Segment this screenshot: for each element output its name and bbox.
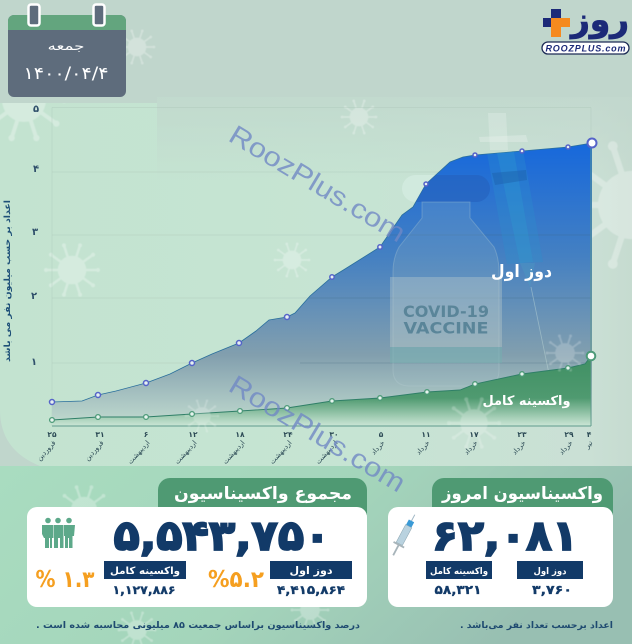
x axis month labels: اردیبهشت — [221, 439, 247, 466]
first dose line — [52, 143, 592, 402]
x axis day labels: ۵ — [379, 430, 384, 439]
total heading tab — [158, 478, 367, 515]
watermark top: RoozPlus.com — [224, 119, 411, 248]
full vaccine percent: % ۱.۳ — [36, 567, 94, 593]
today first dose value: ۳,۷۶۰ — [532, 582, 572, 597]
x axis month labels: خرداد — [511, 439, 527, 457]
header strip over big virus — [0, 0, 157, 103]
y axis labels: ۳ — [32, 227, 38, 238]
vial illustration: VACCINE — [404, 318, 488, 338]
x axis day labels: ۱۱ — [421, 430, 431, 439]
first dose value: ۴,۴۱۵,۸۶۴ — [277, 583, 345, 597]
vaccine label: COVID-19 — [403, 302, 489, 321]
x axis day labels: ۲۴ — [283, 430, 293, 439]
y axis labels — [31, 104, 39, 368]
x axis day labels — [47, 430, 592, 439]
x axis day labels: ۲۵ — [47, 430, 57, 439]
x axis day labels: ۱۷ — [469, 430, 479, 439]
x axis day labels: ۴ — [587, 430, 592, 439]
chart — [50, 108, 596, 449]
total card — [27, 507, 367, 607]
chart panel background — [0, 97, 632, 466]
panel: total vaccination: واکسینه کامل — [110, 566, 180, 577]
x axis month labels: اردیبهشت — [173, 439, 199, 466]
y axis labels: ۱ — [31, 357, 37, 368]
logo — [542, 0, 629, 54]
today full vaccine value: ۵۸,۳۲۱ — [434, 582, 482, 597]
panel: total vaccination: دوز اول — [290, 565, 333, 577]
x axis day labels: ۱۸ — [235, 430, 245, 439]
x axis month labels: اردیبهشت — [314, 439, 340, 466]
x axis month labels: اردیبهشت — [268, 439, 294, 466]
x axis day labels: ۶ — [144, 430, 148, 439]
x axis month labels: خرداد — [463, 439, 479, 457]
syringe illustration — [488, 152, 548, 370]
calendar weekday: جمعه — [48, 39, 84, 53]
panel: today vaccination — [388, 478, 613, 607]
bottom band background — [0, 466, 632, 644]
calendar date: ۱۴۰۰/۰۴/۴ — [24, 64, 108, 84]
logo site name: ROOZPLUS.com — [546, 44, 626, 54]
x axis month labels: اردیبهشت — [126, 439, 152, 466]
bottom and header virus decorations — [58, 29, 329, 644]
total number: ۵,۵۴۳,۷۵۰ — [114, 511, 330, 560]
footnote: today: اعداد برحسب تعداد نفر می‌باشد . — [460, 621, 613, 631]
x axis month labels: خرداد — [370, 439, 386, 457]
series label: full vaccine: واکسینه کامل — [482, 394, 570, 409]
today heading: واکسیناسیون امروز — [441, 484, 603, 504]
full vaccine markers — [50, 352, 595, 422]
first dose label — [270, 561, 352, 579]
icon: people — [42, 518, 75, 548]
y axis labels: ۴ — [33, 164, 39, 175]
series label: first dose: دوز اول — [491, 262, 552, 282]
x axis day labels: ۳۱ — [95, 430, 105, 439]
y axis labels: ۲ — [31, 291, 37, 302]
x axis month labels — [35, 439, 595, 466]
panel: today vaccination: واکسینه کامل — [430, 567, 488, 577]
x axis day labels: ۱۲ — [188, 430, 198, 439]
panel: today vaccination: دوز اول — [534, 567, 567, 577]
chart virus overlays — [185, 334, 584, 449]
x axis month labels: تیر — [583, 439, 595, 451]
background virus decorations — [0, 59, 632, 297]
x axis day labels: ۳۰ — [329, 430, 339, 439]
area: first dose — [52, 143, 592, 426]
today full vaccine label — [426, 561, 492, 579]
today heading tab — [432, 478, 613, 515]
panel: total vaccination — [27, 478, 367, 607]
full vaccine line — [52, 356, 591, 420]
vial illustration — [390, 175, 502, 386]
today first dose label — [517, 561, 583, 579]
y axis title: اعداد بر حسب میلیون نفر می باشد — [3, 200, 13, 362]
x axis month labels: فروردین — [35, 439, 57, 462]
y axis labels: ۵ — [33, 104, 39, 115]
x axis month labels: خرداد — [415, 439, 431, 457]
calendar — [8, 4, 126, 97]
full vaccine label — [104, 561, 186, 579]
x axis month labels: فروردین — [83, 439, 105, 462]
total heading: مجموع واکسیناسیون — [174, 484, 352, 504]
x axis day labels: ۲۳ — [517, 430, 527, 439]
watermark bottom: RoozPlus.com — [224, 369, 411, 498]
today card — [388, 507, 613, 607]
icon: syringe — [388, 512, 420, 558]
full vaccine value: ۱,۱۲۷,۸۸۶ — [112, 583, 176, 597]
x axis day labels: ۲۹ — [564, 430, 574, 439]
logo: روز — [569, 0, 629, 40]
area: full vaccine — [52, 356, 591, 426]
today number: ۶۲,۰۸۱ — [432, 511, 578, 560]
x axis month labels: خرداد — [558, 439, 574, 457]
footnote: total: درصد واکسیناسیون براساس جمعیت ۸۵ میلیونی محاسبه شده است . — [36, 621, 360, 631]
first dose percent: %۵.۲ — [208, 567, 264, 593]
first dose markers — [50, 138, 596, 404]
